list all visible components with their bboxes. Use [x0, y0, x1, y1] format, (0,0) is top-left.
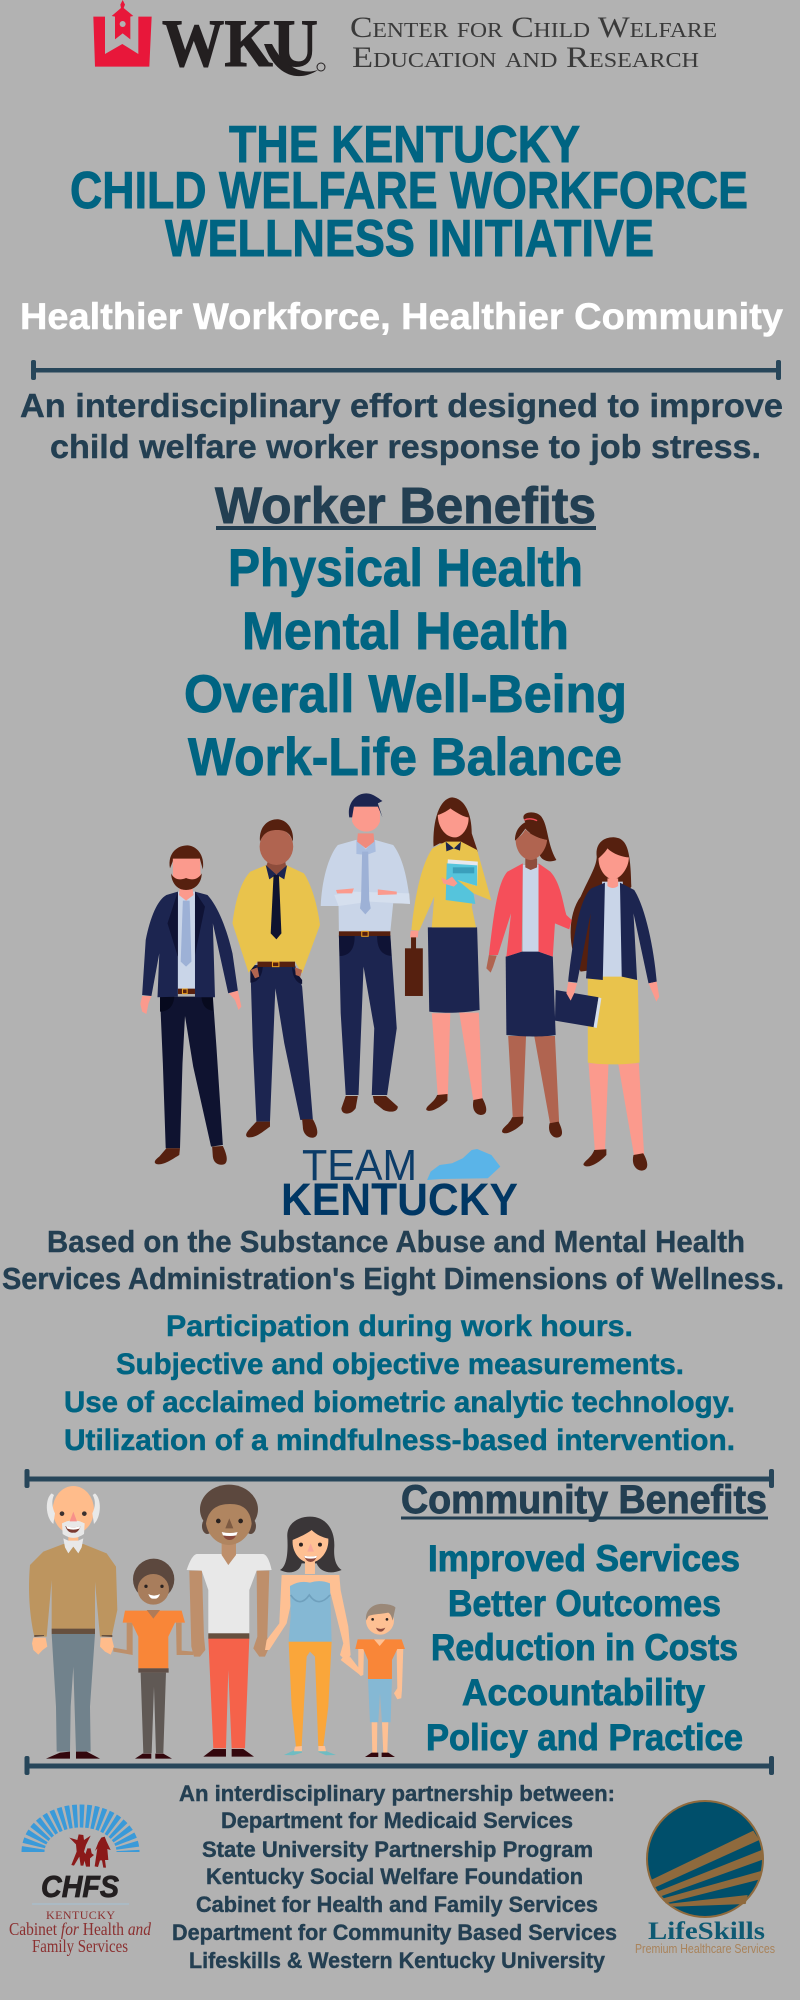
worker 5 woman in coral cardigan	[486, 812, 572, 1138]
text: program features: Participation during work hours.	[166, 1310, 633, 1343]
text: SAMHSA basis	[2, 1224, 784, 1296]
text: partnership list: Department for Community Based Services	[172, 1920, 617, 1945]
center name: Education and Research	[352, 41, 699, 74]
worker 6 woman with folder	[555, 848, 659, 1171]
panel: community benefits	[401, 1478, 768, 1758]
worker 3 man with crossed arms	[321, 793, 410, 1114]
tagline: Healthier Workforce, Healthier Community	[20, 296, 783, 337]
community benefit list: Reduction in Costs	[431, 1627, 738, 1668]
logo: CHFS	[9, 1816, 152, 1956]
text: partnership list: Cabinet for Health and Family Services	[196, 1892, 598, 1917]
text: partnership list: State University Partnership Program	[202, 1837, 593, 1862]
center name	[350, 11, 717, 74]
logo: WKU Center for Child Welfare	[93, 0, 717, 81]
icon: WKU red tower	[93, 0, 152, 67]
logo: Team Kentucky: TEAM	[302, 1141, 417, 1190]
title: THE KENTUCKY	[229, 116, 580, 174]
father	[187, 1485, 272, 1757]
benefit list	[184, 539, 627, 787]
grandfather	[29, 1486, 117, 1759]
logo: LifeSkills	[635, 1801, 775, 1956]
illustration: family	[29, 1485, 405, 1759]
title	[70, 116, 748, 268]
benefit list: Physical Health	[228, 539, 583, 598]
CHFS agency name	[9, 1908, 152, 1956]
panel: worker benefits	[184, 477, 627, 787]
community benefit list: Better Outcomes	[448, 1583, 721, 1624]
older boy	[113, 1559, 193, 1759]
worker 4 woman with book and briefcase	[405, 797, 491, 1115]
benefit list: Work-Life Balance	[188, 728, 622, 787]
title: WELLNESS INITIATIVE	[165, 210, 654, 268]
CHFS wordmark: CHFS	[41, 1869, 119, 1904]
text: program features: Subjective and objective measurements.	[116, 1348, 684, 1381]
community benefit list: Policy and Practice	[426, 1717, 743, 1758]
benefit list: Mental Health	[242, 602, 569, 661]
text: program features: Utilization of a mindfulness-based intervention.	[64, 1424, 735, 1457]
intro text	[20, 387, 783, 465]
divider 1	[31, 360, 781, 380]
text: program features	[64, 1310, 735, 1457]
intro text: An interdisciplinary effort designed to improve	[20, 387, 783, 424]
icon: LifeSkills circle	[647, 1801, 764, 1917]
community benefit list	[426, 1538, 743, 1758]
icon: sunburst	[33, 1816, 128, 1852]
logo: Team Kentucky: KENTUCKY	[281, 1174, 518, 1225]
heading: worker benefits: Worker Benefits	[215, 477, 596, 534]
CHFS agency name: Family Services	[32, 1936, 128, 1956]
CHFS agency name: KENTUCKY	[46, 1908, 115, 1922]
center name: Center for Child Welfare	[350, 11, 717, 44]
worker 1 bearded man	[140, 845, 241, 1165]
WKU wordmark: WKU	[162, 5, 318, 81]
young boy	[347, 1604, 405, 1757]
icon: family figures	[69, 1834, 111, 1868]
intro text: child welfare worker response to job stress.	[50, 428, 761, 465]
CHFS agency name: Cabinet for Health and	[9, 1919, 152, 1939]
mother	[265, 1517, 363, 1755]
text: program features: Use of acclaimed biometric analytic technology.	[64, 1386, 735, 1419]
LifeSkills wordmark: LifeSkills	[648, 1918, 765, 1945]
heading: community benefits: Community Benefits	[401, 1478, 767, 1522]
community benefit list: Accountability	[462, 1672, 705, 1713]
text: partnership list: Kentucky Social Welfare Foundation	[206, 1864, 583, 1889]
illustration: group of six workers	[140, 793, 659, 1171]
logo: Team Kentucky	[281, 1141, 518, 1225]
text: partnership list	[172, 1781, 617, 1973]
text: partnership list: Lifeskills & Western Kentucky University	[189, 1948, 606, 1973]
text: partnership list: An interdisciplinary partnership between:	[179, 1781, 615, 1806]
text: SAMHSA basis: Based on the Substance Abuse and Mental Health	[47, 1224, 745, 1259]
worker 2 man in yellow sweater	[232, 819, 320, 1138]
community benefit list: Improved Services	[428, 1538, 740, 1579]
divider 2	[24, 1469, 774, 1488]
divider 3	[24, 1756, 774, 1775]
benefit list: Overall Well-Being	[184, 665, 627, 724]
icon: Kentucky state outline	[427, 1149, 500, 1180]
text: partnership list: Department for Medicaid Services	[221, 1808, 573, 1833]
worker 6 hair behind	[571, 837, 631, 972]
